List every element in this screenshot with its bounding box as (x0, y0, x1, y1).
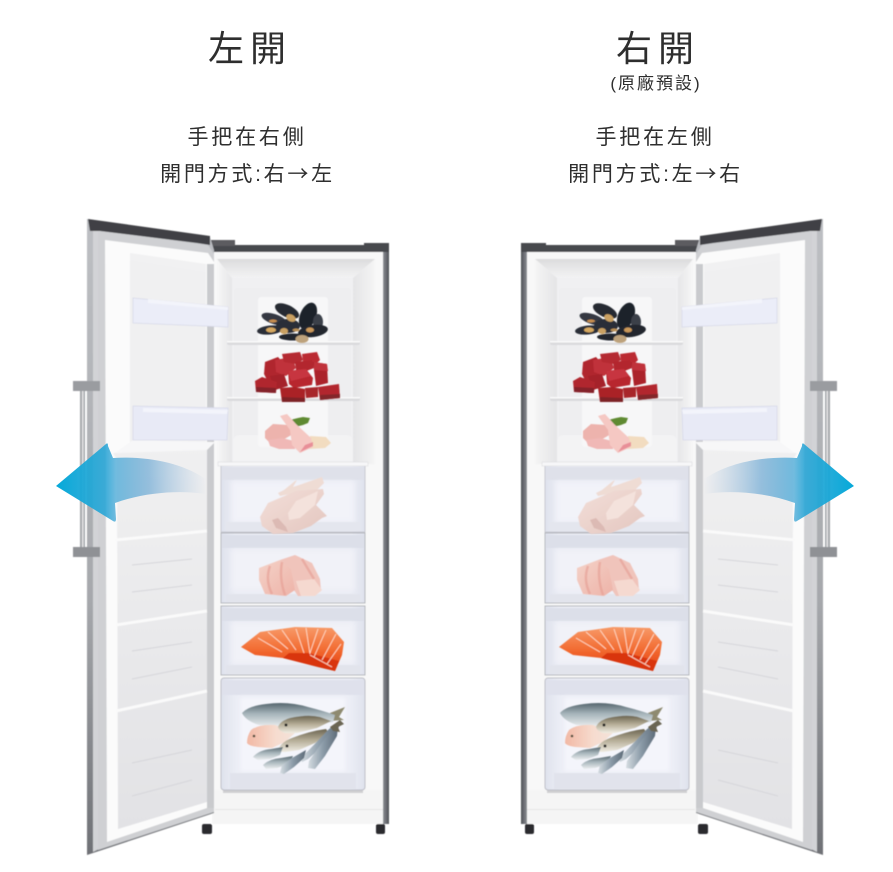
food: white fish fillet (259, 555, 322, 596)
door bins (133, 298, 228, 440)
food: mussels (257, 300, 329, 343)
food: beef cubes (255, 352, 340, 402)
wire shelves (227, 341, 360, 401)
right arrow (704, 443, 854, 522)
text: right opening direction: 開門方式:左→右 (568, 158, 743, 188)
food: whole chicken (260, 477, 327, 534)
text: left handle position: 手把在右側 (188, 126, 306, 149)
freezer drawers (218, 462, 368, 790)
food: salmon fillet (241, 627, 344, 671)
right open fridge (mirrored) (521, 219, 837, 855)
right food items (559, 300, 663, 774)
open door (87, 219, 215, 855)
text: left opening direction: 開門方式:右→左 (160, 158, 335, 188)
heading: left opening: 左開 (208, 28, 292, 69)
heading: right opening: 右開 (616, 28, 700, 69)
food: assorted fish (242, 703, 345, 774)
door handle (73, 381, 100, 557)
cabinet body (205, 240, 389, 824)
left arrow (56, 443, 206, 522)
left food items (241, 300, 345, 774)
text: right handle position: 手把在左側 (596, 126, 714, 149)
note: factory default: (原廠預設) (610, 73, 702, 93)
fridge feet (202, 824, 385, 834)
left open fridge (73, 219, 389, 855)
food: chicken drumsticks (265, 414, 331, 453)
